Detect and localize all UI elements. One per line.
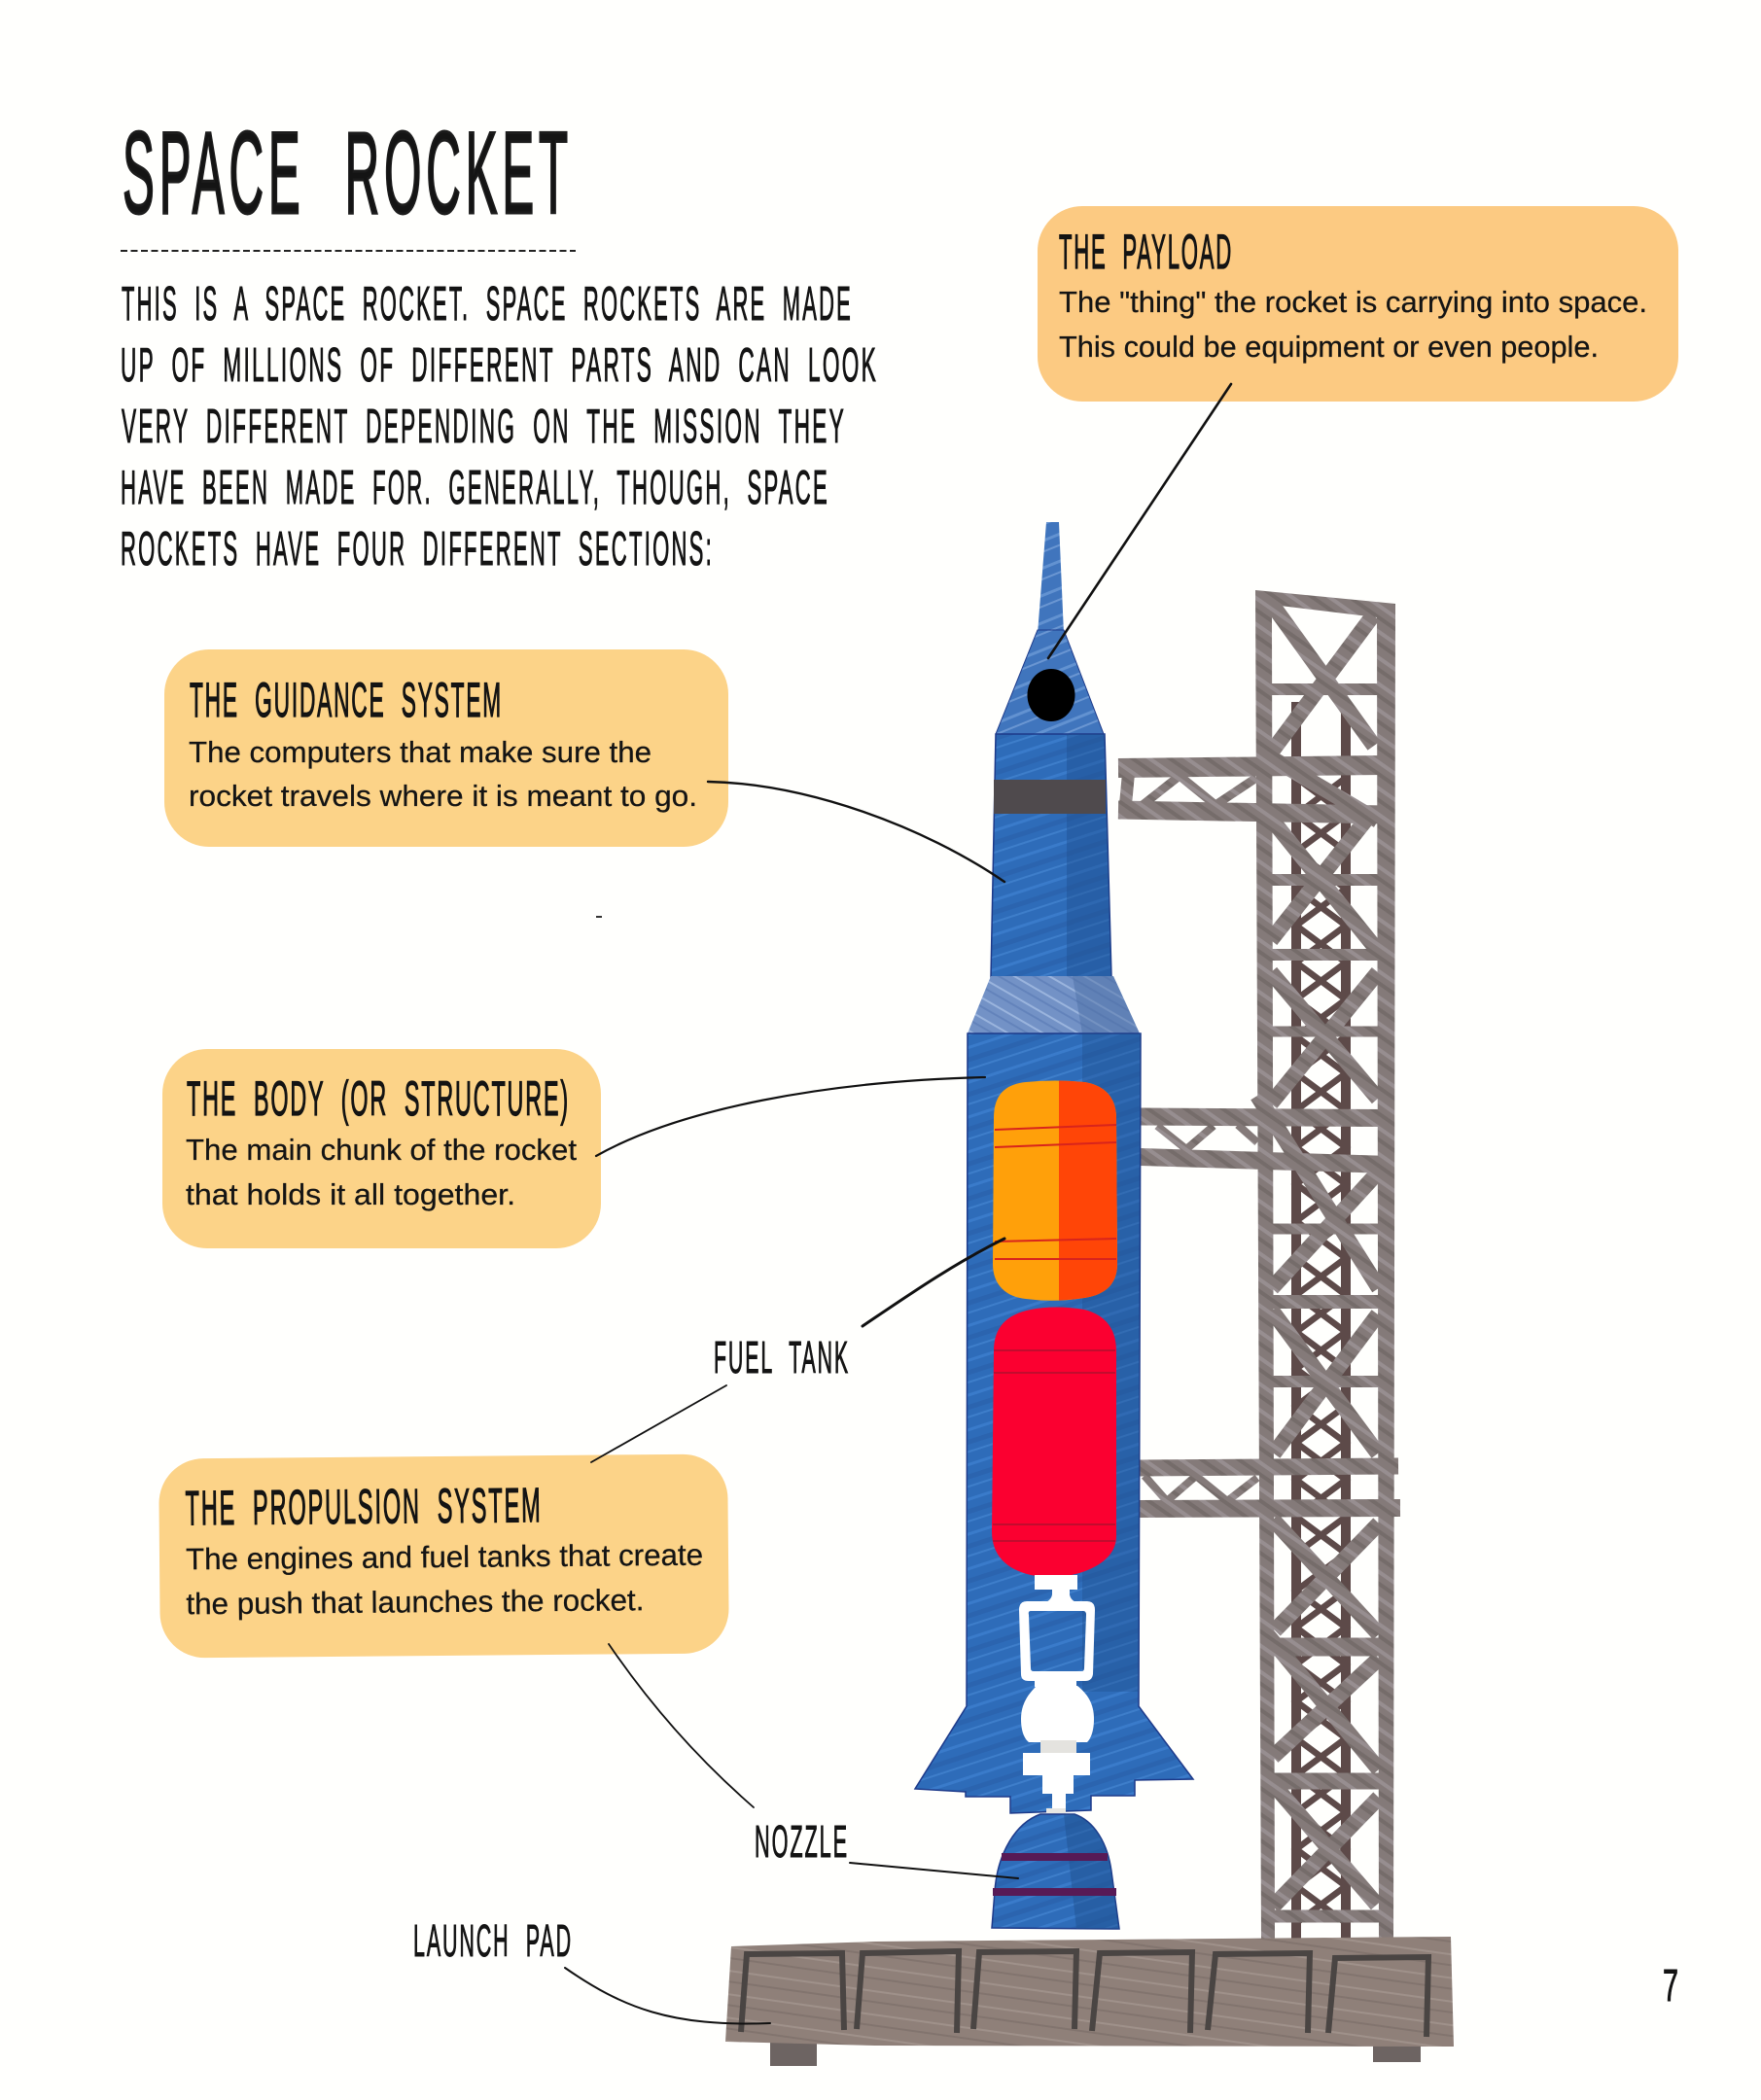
callout: the payload: The "thing" the rocket is carrying into space.: [1059, 285, 1647, 319]
intro text block: ROCKETS HAVE FOUR DIFFERENT SECTIONS:: [121, 523, 714, 576]
arrow: guidance leader: [708, 782, 1004, 882]
text: VERY DIFFERENT DEPENDING ON THE MISSION THEY: [122, 401, 846, 453]
callout: the payload: THE PAYLOAD: [1059, 225, 1233, 279]
pad feet: [770, 2042, 1421, 2066]
arrow: fuel tank leader: [863, 1239, 1004, 1326]
callout: the guidance system: The computers that make sure the: [189, 735, 652, 769]
text: NOZZLE: [755, 1816, 849, 1867]
tower frame: [1255, 590, 1395, 1940]
lower access arm: [1139, 1466, 1400, 1509]
arrow: fuel tank to propulsion: [591, 1385, 726, 1462]
launch tower: [1118, 590, 1400, 1940]
arrow: nozzle leader: [850, 1863, 1018, 1878]
arrow: launch pad leader: [565, 1968, 770, 2024]
pad cells: [741, 1951, 1428, 2037]
text: THIS IS A SPACE ROCKET. SPACE ROCKETS ARE MADE: [122, 278, 853, 331]
rocket: [915, 522, 1193, 1929]
upper body: [991, 734, 1111, 977]
callout: the body: [162, 1049, 601, 1248]
callout: the body: THE BODY (OR STRUCTURE): [187, 1071, 570, 1126]
callout: the guidance system: THE GUIDANCE SYSTEM: [190, 673, 503, 727]
intro text block: [121, 278, 878, 576]
nose spike: [1031, 522, 1070, 647]
callout: the propulsion system: [158, 1453, 729, 1659]
callout: the propulsion system: the push that launches the rocket.: [186, 1583, 645, 1621]
dark band: [994, 780, 1106, 814]
nose cone: [996, 630, 1104, 734]
arrow: body leader: [596, 1077, 985, 1156]
lower fuel tank: [992, 1307, 1116, 1577]
engine parts: [1019, 1575, 1095, 1816]
callout: the propulsion system: THE PROPULSION SYSTEM: [185, 1478, 543, 1535]
text: SPACE ROCKET: [123, 108, 573, 238]
callout: the body: that holds it all together.: [186, 1177, 515, 1211]
upper access arm: [1118, 765, 1386, 815]
callout: the payload: [1038, 206, 1678, 402]
nozzle: [992, 1814, 1119, 1929]
page number: 7: [1663, 1960, 1678, 2011]
callout: the payload: This could be equipment or even people.: [1059, 330, 1599, 364]
callout: the guidance system: rocket travels where it is meant to go.: [189, 779, 697, 813]
launch pad: [725, 1937, 1454, 2066]
callout: the guidance system: [164, 649, 728, 847]
callout: the body: The main chunk of the rocket: [186, 1133, 577, 1167]
text: UP OF MILLIONS OF DIFFERENT PARTS AND CAN LOOK: [121, 339, 878, 392]
arrow: propulsion to nozzle: [609, 1644, 754, 1807]
window: [1027, 669, 1075, 721]
upper fuel tank: [993, 1081, 1117, 1301]
tower inner lattice: [1296, 702, 1346, 1940]
stray mark: [596, 916, 602, 918]
shoulder: [968, 976, 1140, 1033]
text: FUEL TANK: [714, 1332, 850, 1382]
callout: the propulsion system: The engines and fuel tanks that create: [186, 1538, 703, 1576]
text: LAUNCH PAD: [413, 1915, 573, 1966]
middle access arm: [1141, 1116, 1391, 1165]
text: HAVE BEEN MADE FOR. GENERALLY, THOUGH, SPACE: [121, 462, 829, 514]
arrow: payload leader: [1048, 384, 1231, 658]
lower body and fins: [915, 1033, 1193, 1813]
